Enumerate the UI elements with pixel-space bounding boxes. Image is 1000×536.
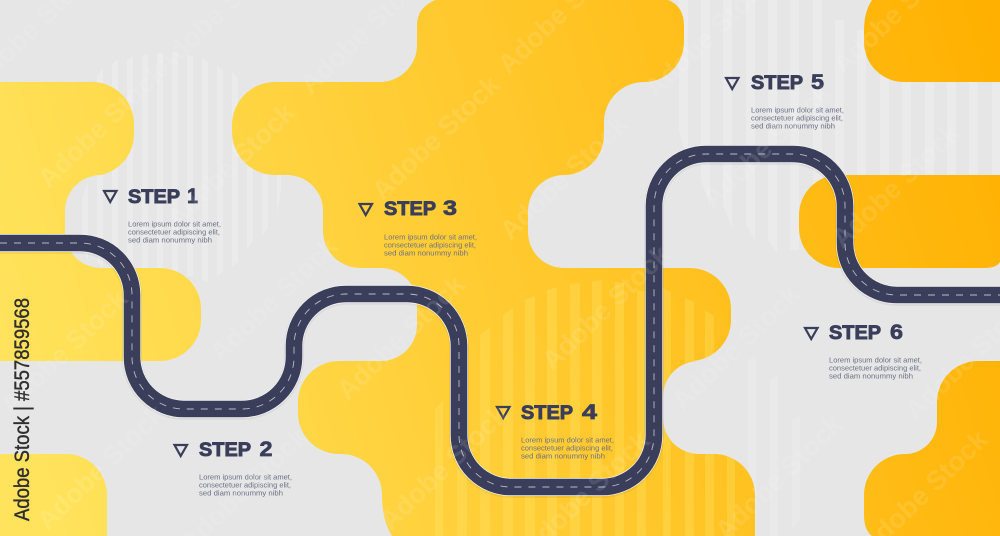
text: step 6 description: sed diam nonummy nibh (829, 372, 913, 380)
step 6 (805, 321, 922, 380)
number: step 2: 2 (260, 438, 272, 461)
heading: step 6: STEP (829, 323, 881, 344)
text: step 5 description: Lorem ipsum dolor sit amet, (751, 106, 844, 114)
road (0, 154, 1000, 488)
text: step 4 description: sed diam nonummy nibh (521, 452, 605, 460)
watermarks: Adobe Stock (697, 77, 837, 214)
heading: step 3: STEP (384, 199, 436, 220)
road edge (0, 154, 1000, 487)
yellow shape: middle right (799, 175, 1000, 268)
yellow shape: centre (232, 0, 755, 536)
text: step 2 description: sed diam nonummy nibh (199, 488, 283, 498)
yellow shape: left upper (0, 82, 201, 361)
watermarks: Adobe Stock (161, 97, 301, 234)
watermarks: Adobe Stock (31, 399, 171, 536)
yellow shape: bottom right (864, 361, 1000, 536)
text: step 5 description: consectetuer adipiscing elit, (751, 114, 843, 122)
stripes: right background (679, 0, 1000, 536)
text: step 3 description: sed diam nonummy nibh (384, 248, 468, 258)
text: step 3 description: consectetuer adipiscing elit, (384, 240, 476, 250)
watermarks: Adobe Stock (666, 279, 806, 416)
text: step 1 description: sed diam nonummy nibh (128, 236, 212, 244)
heading: step 5: STEP (751, 73, 803, 94)
watermarks: Adobe Stock (374, 399, 514, 536)
icon: triangle 1 (104, 191, 116, 202)
icon: triangle 3 (360, 204, 372, 215)
yellow shape: top right (864, 0, 1000, 82)
watermarks: Adobe Stock (494, 109, 634, 246)
text: step 6 description: Lorem ipsum dolor sit amet, (829, 356, 922, 364)
step 2 (174, 438, 292, 498)
step 1 (104, 185, 221, 244)
heading: step 1: STEP (128, 187, 180, 208)
heading: step 4: STEP (521, 403, 573, 424)
stock id vertical label: Adobe Stock | #557859568 (11, 298, 34, 521)
text: step 4 description: Lorem ipsum dolor sit amet, (521, 436, 614, 444)
step 5 (726, 71, 844, 130)
road surface (0, 154, 1000, 487)
number: step 1: 1 (187, 185, 198, 208)
watermarks: Adobe Stock (536, 239, 676, 376)
number: step 5: 5 (811, 71, 824, 94)
yellow shape: left lower (0, 454, 107, 536)
watermarks: Adobe Stock (826, 117, 966, 254)
text: step 3 description: Lorem ipsum dolor sit amet, (384, 232, 477, 242)
watermarks: Adobe Stock (331, 269, 471, 406)
stripes: yellow area (435, 280, 735, 536)
step 3 (360, 197, 477, 258)
text: step 4 description: consectetuer adipiscing elit, (521, 444, 613, 452)
icon: triangle 4 (497, 407, 510, 418)
number: step 4: 4 (582, 401, 597, 424)
text: step 2 description: consectetuer adipiscing elit, (199, 480, 291, 490)
text: step 1 description: consectetuer adipiscing elit, (128, 228, 220, 236)
icon: triangle 6 (805, 328, 818, 339)
stripes: left background (82, 52, 281, 282)
icon: triangle 2 (174, 445, 187, 456)
text: step 5 description: sed diam nonummy nibh (751, 122, 835, 130)
icon: triangle 5 (726, 78, 738, 89)
step 4 (497, 401, 614, 460)
number: step 3: 3 (443, 197, 457, 220)
heading: step 2: STEP (199, 440, 251, 461)
road centre dashes (0, 154, 1000, 487)
watermarks: Adobe Stock (204, 231, 344, 368)
number: step 6: 6 (890, 321, 903, 344)
watermarks: Adobe Stock (32, 57, 172, 194)
text: step 1 description: Lorem ipsum dolor sit amet, (128, 220, 221, 228)
text: step 2 description: Lorem ipsum dolor sit amet, (199, 472, 292, 482)
road shadow (0, 155, 1000, 488)
text: step 6 description: consectetuer adipiscing elit, (829, 364, 921, 372)
watermarks: Adobe Stock (366, 69, 506, 206)
